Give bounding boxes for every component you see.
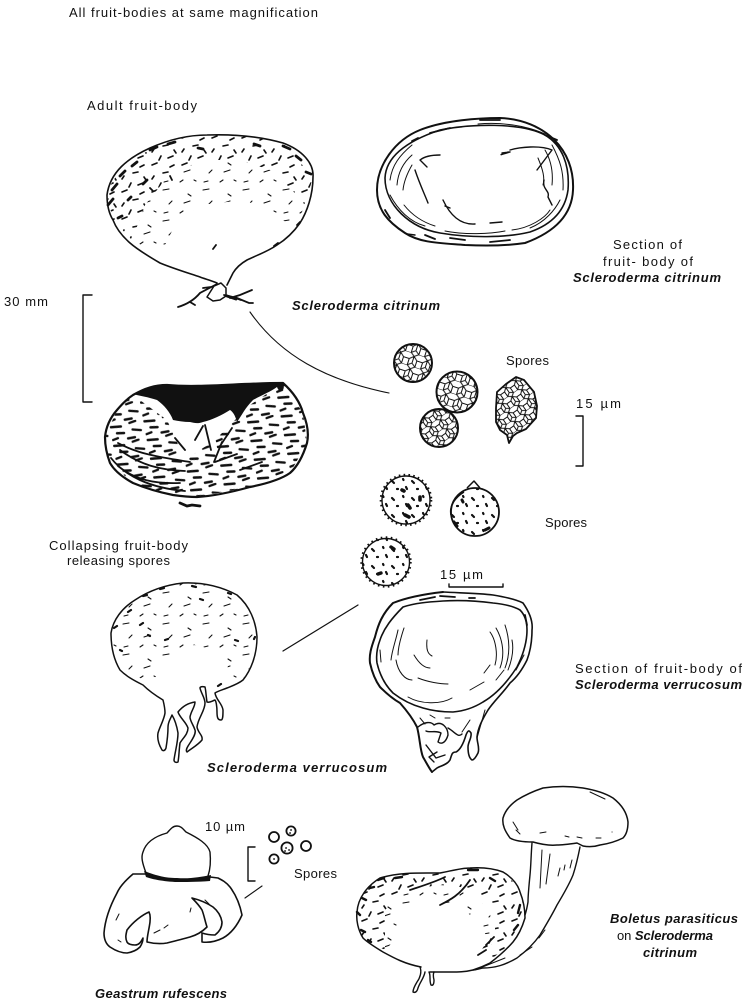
label: section of Scleroderma citrinum: Section of	[613, 237, 682, 252]
illustration: section of Scleroderma verrucosum fruit-body	[370, 592, 532, 772]
illustration: Boletus parasiticus on Scleroderma citrinum	[357, 786, 628, 992]
label: collapsing fruit-body: releasing spores	[67, 553, 170, 568]
scale bar: 15 µm vertical	[576, 396, 621, 466]
label: Scleroderma citrinum: Scleroderma citrinum	[292, 298, 440, 313]
scale bar: 30 mm: 30 mm	[4, 294, 48, 309]
label: Geastrum rufescens: Geastrum rufescens	[95, 986, 227, 1001]
label: spores lower: Spores	[545, 515, 588, 530]
label: Boletus parasiticus: on Scleroderma	[617, 928, 713, 943]
label: Boletus parasiticus: Boletus parasiticus	[610, 911, 738, 926]
scale bar: 10 µm	[248, 847, 255, 881]
label: section of Scleroderma citrinum: fruit- body of	[603, 254, 693, 269]
label: section of Scleroderma verrucosum	[575, 661, 742, 692]
illustration: Geastrum spores	[269, 826, 311, 864]
label: section of Scleroderma citrinum: Scleroderma citrinum	[573, 270, 721, 285]
label: Boletus parasiticus	[610, 911, 738, 960]
label: section of Scleroderma citrinum	[573, 237, 721, 285]
label: collapsing fruit-body: Collapsing fruit-body	[49, 538, 188, 553]
label: spores Geastrum: Spores	[294, 866, 338, 881]
label: spores top: Spores	[506, 353, 550, 368]
illustration: Scleroderma verrucosum fruit-body	[111, 583, 257, 762]
scale bar: 30 mm	[4, 294, 92, 402]
label: adult fruit-body: Adult fruit-body	[87, 98, 198, 113]
connector line to spores	[250, 312, 389, 393]
label: Boletus parasiticus: citrinum	[643, 945, 697, 960]
scale bar: 15 µm horizontal	[440, 567, 503, 587]
illustration: Geastrum rufescens	[104, 826, 242, 953]
scale bar: 15 µm horizontal: 15 µm	[440, 567, 483, 582]
scale bar: 15 µm vertical: 15 µm	[576, 396, 621, 411]
connector line	[245, 886, 262, 898]
label: section of Scleroderma verrucosum: Section of fruit-body of	[575, 661, 742, 676]
heading: magnification note: All fruit-bodies at same magnification	[69, 5, 318, 20]
illustration: roots of adult fruit-body	[178, 283, 253, 307]
illustration: Scleroderma citrinum spores	[394, 344, 537, 447]
label: 10 µm: 10 µm	[205, 819, 245, 834]
illustration: Scleroderma verrucosum spores	[362, 475, 499, 586]
connector line to verrucosum spores	[283, 605, 358, 651]
illustration: collapsing fruit-body releasing spores	[105, 383, 308, 506]
label: Scleroderma verrucosum: Scleroderma verrucosum	[207, 760, 387, 775]
illustration: section of Scleroderma citrinum fruit-body	[377, 118, 573, 246]
label: collapsing fruit-body	[49, 538, 188, 568]
illustration: adult Scleroderma citrinum fruit-body	[107, 135, 313, 285]
label: section of Scleroderma verrucosum: Scleroderma verrucosum	[575, 677, 742, 692]
